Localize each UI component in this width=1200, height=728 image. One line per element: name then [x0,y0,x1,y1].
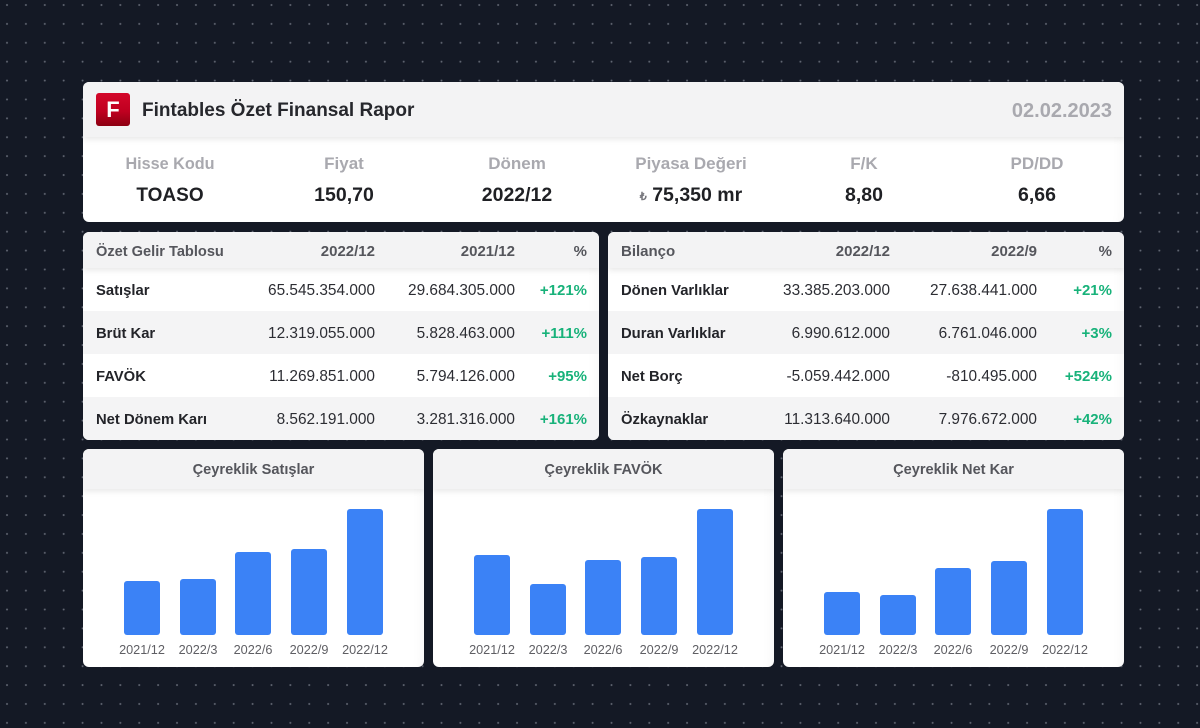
bar chart: quarterly sales: 2022/3 [179,643,217,657]
row: EBITDA [96,368,587,385]
table header: 2021/12 [461,243,515,260]
row: equity: 7.976.672.000 [939,411,1037,428]
row: gross profit: 12.319.055.000 [268,325,375,342]
row: current assets: Dönen Varlıklar [621,283,729,299]
row: current assets: +21% [1073,282,1112,299]
bar chart: quarterly net income: 2022/3 [879,643,917,657]
bar chart: quarterly net income: 2022/12 [1042,643,1088,657]
row: non-current assets: 6.990.612.000 [792,325,890,342]
stat: P/E: F/K [850,154,878,173]
table header: 2022/9 [991,243,1037,260]
row: equity: 11.313.640.000 [784,411,890,428]
bar chart: quarterly sales [119,509,388,657]
bar chart: quarterly EBITDA [469,509,738,657]
table header: % [574,243,587,260]
stat: market cap: ₺ 75,350 mr [640,184,742,206]
row: net debt: -810.495.000 [946,368,1037,385]
stat: price: 150,70 [314,184,374,206]
row: net debt: Net Borç [621,369,683,385]
row: sales: Satışlar [96,283,149,299]
row: net income: +161% [540,411,587,428]
row: sales: 65.545.354.000 [268,282,375,299]
row: non-current assets [608,311,1124,354]
stat: period: Dönem [488,154,546,173]
table header: Bilanço [621,243,675,260]
stat: P/B [1011,154,1063,206]
stat: ticker: Hisse Kodu [125,155,215,173]
row: EBITDA: 11.269.851.000 [269,368,375,385]
stat: ticker [125,155,215,206]
stat: price [314,154,374,206]
table header: 2022/12 [836,243,890,260]
panel: balance sheet table [608,232,1124,440]
row: net debt: -5.059.442.000 [786,368,890,385]
report date: 02.02.2023 [1012,100,1112,122]
row: current assets [621,282,1112,299]
row: EBITDA: FAVÖK [96,369,146,385]
panel: quarterly EBITDA chart [433,449,774,667]
bar chart: quarterly EBITDA: 2022/12 [692,643,738,657]
bar chart: quarterly sales: 2021/12 [119,643,165,657]
stat: P/B: 6,66 [1018,184,1056,206]
bar chart: quarterly sales: 2022/12 [342,643,388,657]
bar chart: quarterly EBITDA: 2022/3 [529,643,567,657]
stat: P/E [845,154,883,206]
bar chart: quarterly sales: 2022/9 [290,643,328,657]
row: non-current assets: Duran Varlıklar [621,326,725,342]
bar chart: quarterly net income: 2021/12 [819,643,865,657]
chart heading: Çeyreklik FAVÖK [544,462,663,478]
bar chart: quarterly sales: 2022/6 [234,643,272,657]
table header: 2022/12 [321,243,375,260]
table header [83,232,599,268]
row: gross profit [83,311,599,354]
chart heading [433,449,774,489]
report header bar [83,82,1124,137]
panel: income statement table [83,232,599,440]
row: sales [96,282,587,299]
row: net income: 3.281.316.000 [417,411,515,428]
row: net income: Net Dönem Karı [96,412,207,428]
table header: Özet Gelir Tablosu [96,244,224,260]
panel: quarterly sales chart [83,449,424,667]
row: equity: +42% [1073,411,1112,428]
bar chart: quarterly EBITDA: 2022/9 [640,643,678,657]
icon: Fintables logo [96,93,130,126]
row: current assets: 33.385.203.000 [783,282,890,299]
bar chart: quarterly EBITDA: 2021/12 [469,643,515,657]
icon: Fintables logo: F [106,97,120,122]
row: gross profit: Brüt Kar [96,326,155,342]
chart heading [83,449,424,489]
row: net income: 8.562.191.000 [277,411,375,428]
chart heading [783,449,1124,489]
row: sales: 29.684.305.000 [408,282,515,299]
stat: P/E: 8,80 [845,184,883,206]
table header [608,232,1124,268]
stat: price: Fiyat [324,154,364,173]
stat: P/B: PD/DD [1011,154,1063,173]
bar chart: quarterly net income [819,509,1088,657]
bar chart: quarterly net income: 2022/6 [934,643,972,657]
title: Fintables Özet Finansal Rapor [142,100,414,121]
row: equity [608,397,1124,440]
row: net debt: +524% [1065,368,1112,385]
panel: report summary [83,82,1124,222]
stat: ticker: TOASO [136,185,204,206]
row: equity: Özkaynaklar [621,412,708,428]
panel: quarterly net income chart [783,449,1124,667]
chart heading: Çeyreklik Satışlar [193,462,314,478]
stat: period: 2022/12 [482,184,552,206]
stat: market cap [635,154,747,206]
bar chart: quarterly net income: 2022/9 [990,643,1028,657]
row: sales: +121% [540,282,587,299]
row: gross profit: +111% [542,325,587,342]
row: net debt [621,368,1112,385]
row: EBITDA: 5.794.126.000 [417,368,515,385]
row: EBITDA: +95% [548,368,587,385]
stat: market cap: Piyasa Değeri [635,154,747,173]
row: non-current assets: 6.761.046.000 [939,325,1037,342]
row: non-current assets: +3% [1082,325,1112,342]
row: gross profit: 5.828.463.000 [417,325,515,342]
bar chart: quarterly EBITDA: 2022/6 [584,643,622,657]
stat: period [482,154,552,206]
table header: % [1099,243,1112,260]
row: current assets: 27.638.441.000 [930,282,1037,299]
chart heading: Çeyreklik Net Kar [893,462,1014,478]
row: net income [83,397,599,440]
